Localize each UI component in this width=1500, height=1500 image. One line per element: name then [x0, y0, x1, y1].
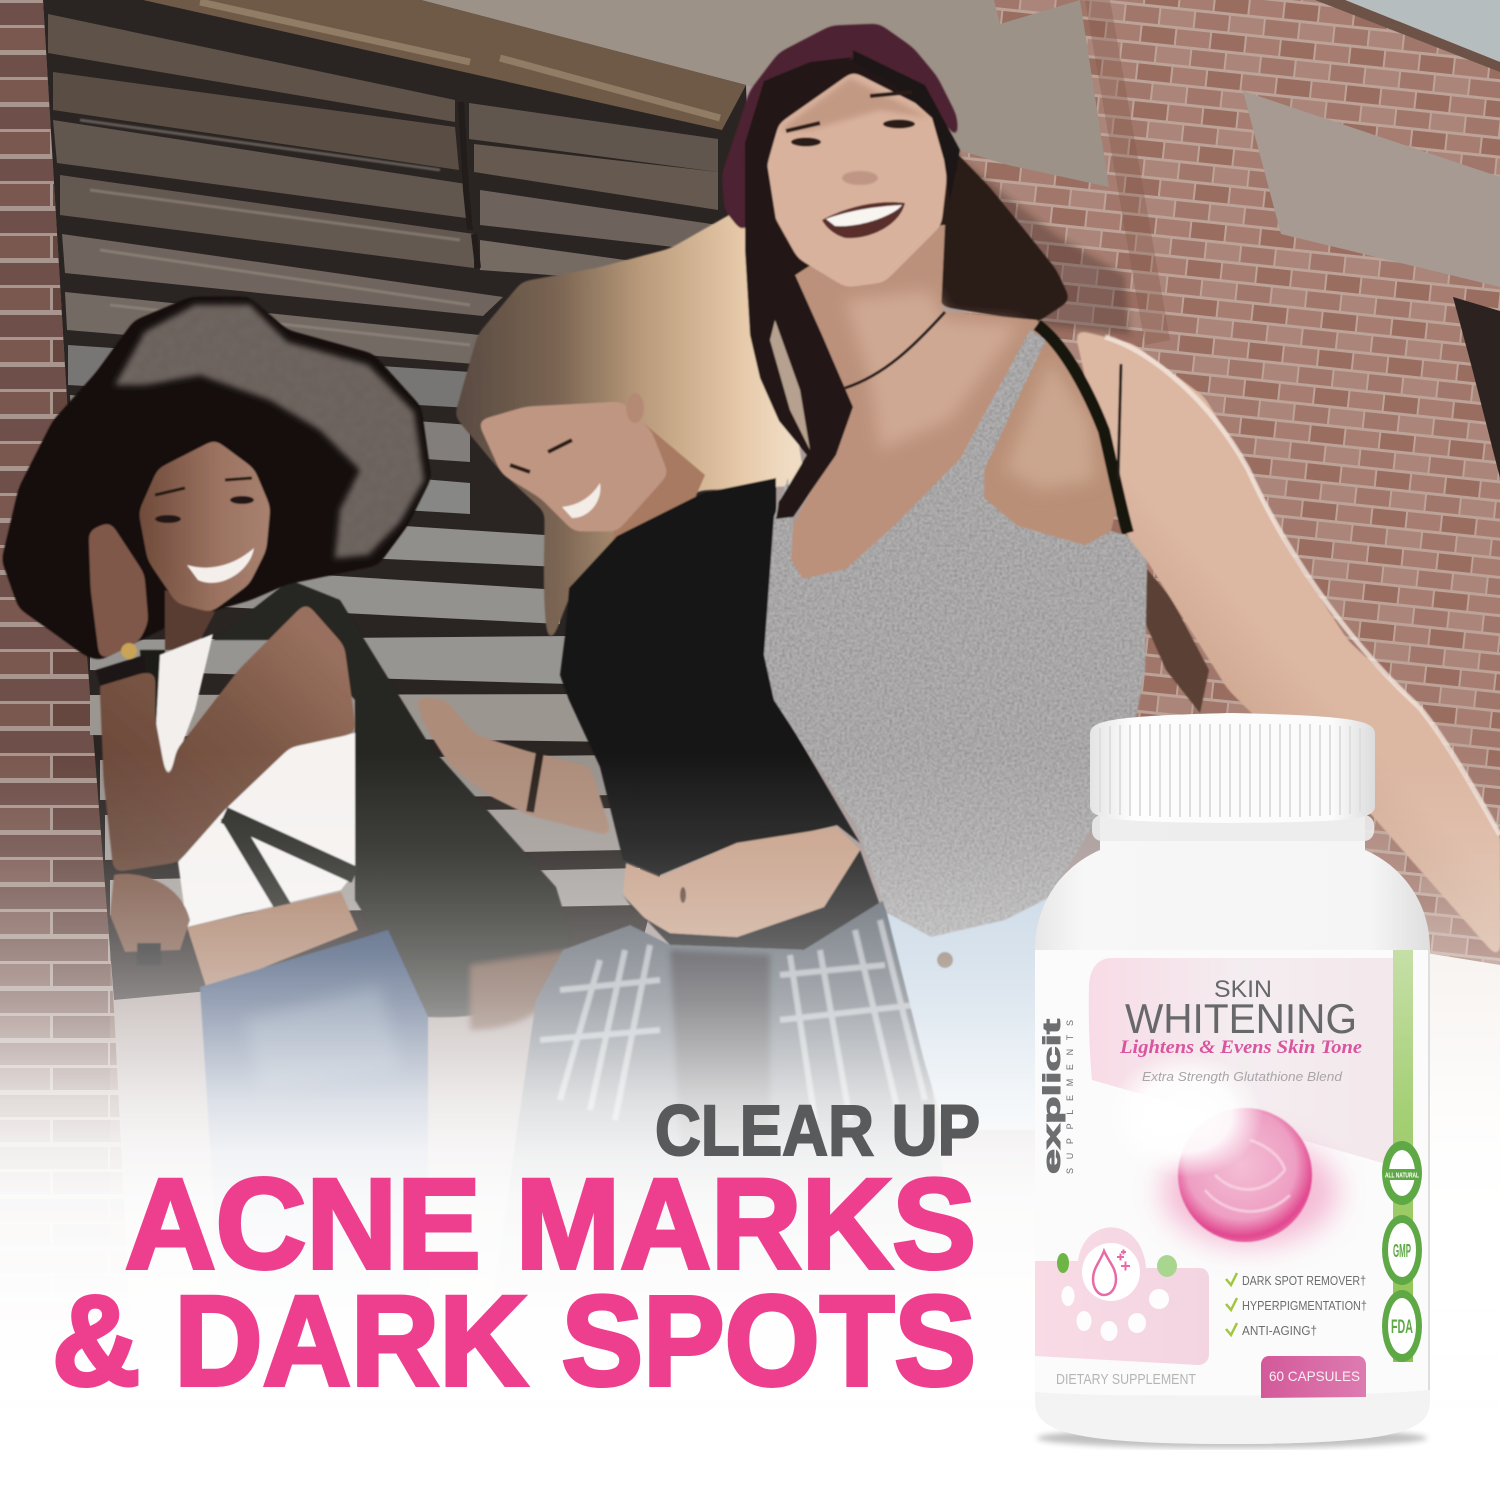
face	[139, 440, 270, 612]
backpack bottom brown	[470, 950, 568, 1030]
item: dark spot remover: DARK SPOT REMOVER†	[1242, 1274, 1366, 1288]
jeans	[200, 930, 428, 1320]
badge: all natural: ALL NATURAL	[1385, 1172, 1420, 1180]
grey tank top	[764, 330, 1147, 937]
capsule count tag	[1261, 1356, 1366, 1398]
headline line: clear up: CLEAR UP	[655, 1092, 980, 1171]
ear	[626, 393, 644, 423]
brand subtitle: SUPPLEMENTS	[1065, 1020, 1075, 1174]
wrist charm	[121, 643, 137, 659]
plaid shirt	[490, 900, 960, 1320]
sphere texture arcs	[1205, 1140, 1290, 1211]
front straps	[224, 815, 355, 915]
head: face	[767, 72, 946, 287]
fringe right	[853, 50, 960, 200]
black top	[560, 478, 860, 875]
reaching arm	[415, 697, 612, 836]
green dot dark	[1057, 1253, 1069, 1273]
face	[478, 402, 668, 531]
benefit checklist	[1226, 1273, 1367, 1338]
afro sun-lit curls	[115, 305, 424, 558]
right arm	[1075, 330, 1500, 960]
neck	[612, 420, 705, 540]
label bottom band	[1035, 1390, 1430, 1444]
headline	[52, 1092, 980, 1413]
neck light	[845, 290, 1020, 450]
dark opening right	[1453, 297, 1500, 478]
product bottle	[1035, 713, 1430, 1448]
pavement glare	[1030, 905, 1500, 1500]
arm rim light	[1105, 337, 1500, 835]
long strands lower	[1145, 569, 1209, 713]
jeans	[887, 897, 1050, 1130]
person: middle woman	[415, 211, 960, 1320]
shadow behind arm	[140, 650, 170, 800]
green side strip	[1393, 950, 1413, 1362]
hand lower	[110, 874, 190, 952]
navel	[680, 887, 686, 903]
sphere highlight	[1107, 1053, 1263, 1177]
blonde hair	[455, 211, 805, 684]
pink panel with drop	[1035, 1227, 1209, 1365]
badge: gmp	[1382, 1215, 1422, 1285]
sparkles	[1117, 1250, 1130, 1270]
badge: all natural	[1382, 1141, 1422, 1205]
headline line: acne marks: ACNE MARKS	[125, 1153, 976, 1296]
hair core right	[934, 143, 1070, 322]
plaid lines	[540, 920, 925, 1120]
thin hair lock	[1118, 364, 1121, 480]
white circle	[1082, 1243, 1140, 1301]
badge: fda	[1382, 1290, 1422, 1362]
light gap between strands	[770, 320, 810, 450]
blend line: Extra Strength Glutathione Blend	[1142, 1069, 1343, 1084]
drop icon	[1093, 1251, 1116, 1295]
long dark hair left	[745, 57, 853, 519]
black hair lock on shoulder	[1037, 325, 1128, 533]
face shade	[780, 78, 930, 130]
white dots	[1062, 1286, 1169, 1341]
strap end	[137, 943, 161, 965]
badge: gmp: GMP	[1393, 1241, 1411, 1261]
hair wisps right	[950, 150, 1130, 335]
badge: fda: FDA	[1391, 1317, 1413, 1338]
dietary supplement label: DIETARY SUPPLEMENT	[1056, 1371, 1196, 1388]
afro hair	[2, 297, 431, 660]
brick wall left	[0, 0, 130, 1320]
item: hyperpigmentation: HYPERPIGMENTATION†	[1242, 1299, 1367, 1313]
concrete lintel	[421, 0, 1109, 187]
item: anti-aging: ANTI-AGING†	[1242, 1324, 1317, 1338]
sphere	[1178, 1108, 1312, 1242]
window sill	[1315, 0, 1500, 72]
plaid dark centre	[670, 950, 770, 1150]
smile	[822, 202, 905, 238]
shutter dividers	[461, 102, 478, 268]
green dot light	[1157, 1255, 1177, 1277]
brand wordmark: explicit	[1039, 1019, 1066, 1174]
hair cap behind face	[745, 45, 958, 285]
arm	[100, 603, 355, 872]
person: right woman	[722, 24, 1500, 1130]
neck ring	[1092, 815, 1374, 841]
brick wall right	[960, 0, 1500, 965]
neck and chest	[775, 225, 1042, 579]
jeans wash	[245, 985, 400, 1090]
bottle body	[1035, 815, 1430, 1444]
neck	[165, 590, 215, 650]
window top right	[1345, 0, 1500, 62]
headline line: dark spots: & DARK SPOTS	[52, 1270, 976, 1413]
person: left woman	[2, 297, 570, 1320]
louvred shutter	[43, 0, 760, 1000]
title: whitening: WHITENING	[1125, 995, 1357, 1042]
cap	[1090, 713, 1375, 823]
pink banner	[1089, 958, 1393, 1166]
sphere feather glow	[1162, 1138, 1338, 1246]
hand on hair	[89, 522, 148, 660]
white label	[1035, 950, 1428, 1395]
title: skin: SKIN	[1214, 976, 1272, 1003]
rust band	[143, 0, 746, 130]
dark shirt band	[623, 850, 880, 950]
capsule count tag: 60 CAPSULES	[1269, 1368, 1360, 1384]
wristband	[96, 655, 146, 686]
nose shadow	[842, 171, 878, 185]
necklace	[845, 312, 945, 388]
product title	[1119, 976, 1363, 1084]
backpack	[213, 580, 570, 1017]
bottle shadow	[1037, 1428, 1427, 1448]
pink skin sphere	[1107, 1053, 1338, 1246]
panel shape	[1035, 1227, 1209, 1365]
white top lower	[178, 733, 355, 927]
eyes and smile	[155, 478, 254, 583]
midriff	[623, 827, 860, 937]
script tagline: Lightens & Evens Skin Tone	[1119, 1037, 1363, 1058]
jeans button	[937, 952, 953, 968]
eyes and smile	[510, 440, 600, 518]
concrete panel right	[1243, 91, 1500, 287]
midriff	[187, 892, 358, 990]
beanie	[722, 24, 960, 235]
white top upper	[155, 634, 213, 790]
armpit lit	[1005, 360, 1095, 490]
darker brick pier	[1085, 0, 1170, 345]
bracelet	[530, 752, 540, 812]
eyes and brows	[786, 92, 915, 146]
armpit shadow	[984, 340, 1118, 545]
brand logo vertical	[1039, 1019, 1075, 1174]
